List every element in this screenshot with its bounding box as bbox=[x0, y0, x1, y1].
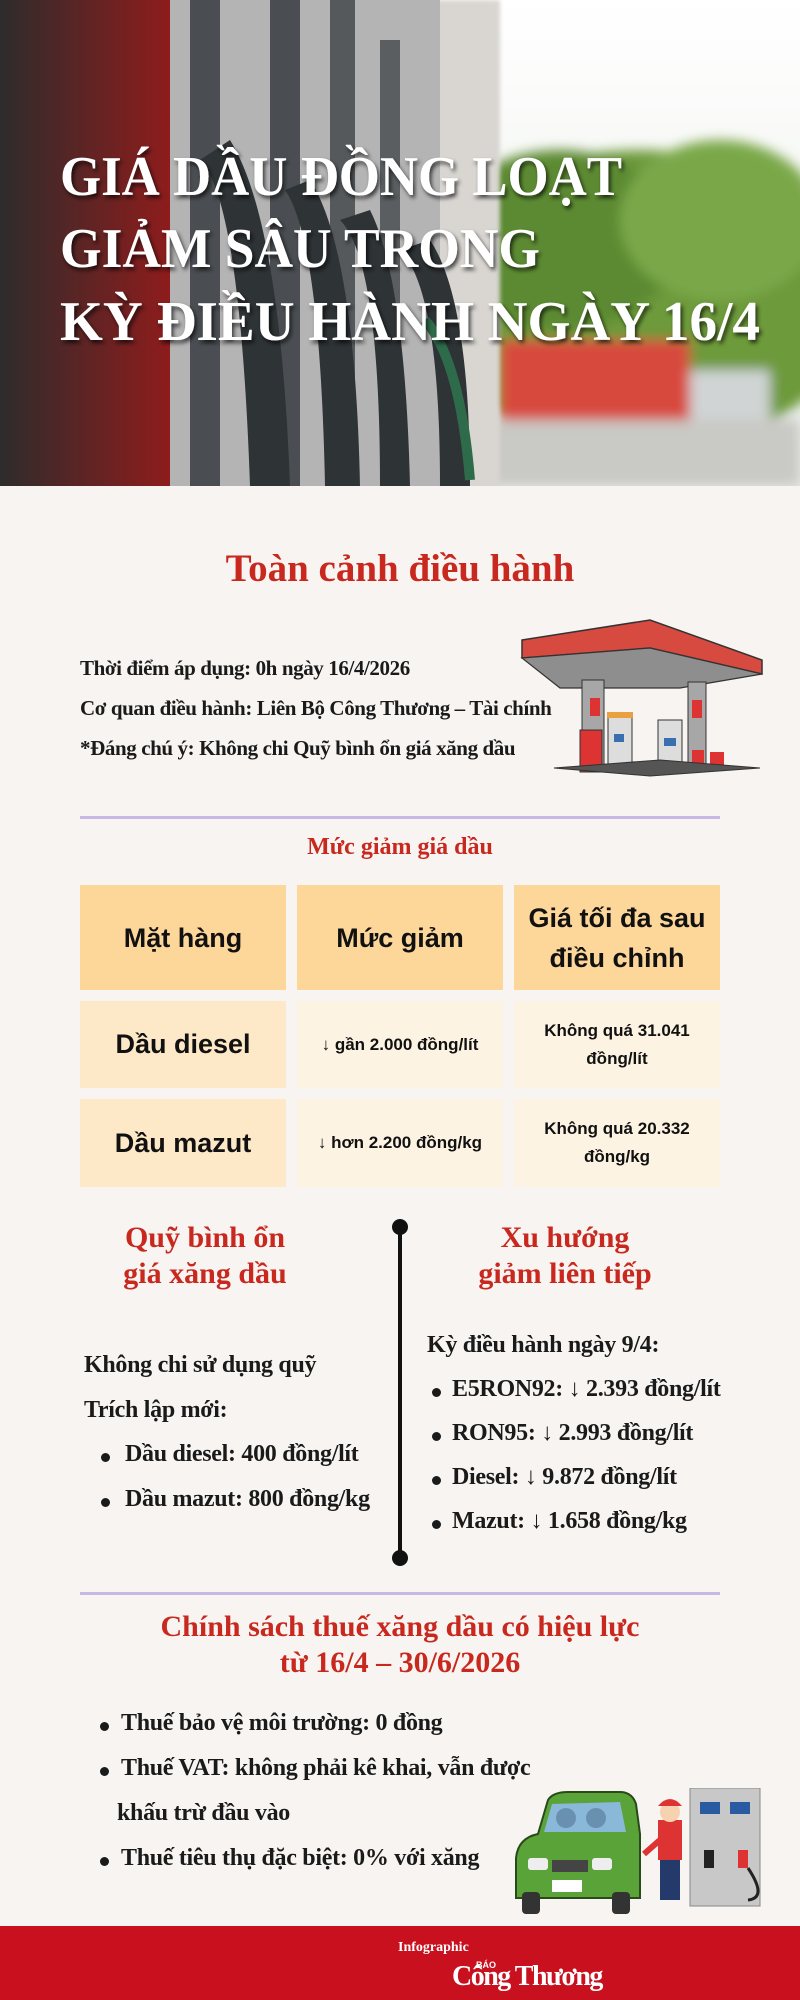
text block: trend bbox=[427, 1332, 721, 1534]
heading: tax policy: Chính sách thuế xăng dầu có hiệu lực bbox=[161, 1610, 639, 1643]
text block: trend: Kỳ điều hành ngày 9/4: bbox=[427, 1332, 659, 1358]
header: giá tối đa: Giá tối đa sau bbox=[528, 902, 706, 932]
heading: tax policy: từ 16/4 – 30/6/2026 bbox=[280, 1646, 520, 1679]
text block: trend: E5RON92: ↓ 2.393 đồng/lít bbox=[452, 1376, 721, 1402]
row: dầu mazut bbox=[80, 1099, 286, 1187]
logo bbox=[398, 1940, 604, 1992]
divider bbox=[80, 816, 720, 819]
title: GIẢM SÂU TRONG bbox=[60, 217, 540, 280]
heading: xu hướng bbox=[478, 1221, 652, 1290]
table: price reductions: Không quá 31.041 bbox=[544, 1020, 690, 1040]
text block: overview info: Thời điểm áp dụng: 0h ngày 16/4/2026 bbox=[80, 656, 410, 680]
title: KỲ ĐIỀU HÀNH NGÀY 16/4 bbox=[60, 289, 760, 353]
text block: tax bullets: Thuế tiêu thụ đặc biệt: 0% với xăng bbox=[121, 1845, 479, 1871]
title bbox=[60, 144, 760, 353]
text block: trend: RON95: ↓ 2.993 đồng/lít bbox=[452, 1420, 693, 1446]
heading: quỹ bình ổn: Quỹ bình ổn bbox=[125, 1221, 285, 1254]
header: mặt hàng bbox=[80, 885, 286, 990]
table: price reductions bbox=[80, 885, 720, 1187]
header: giá tối đa bbox=[514, 885, 720, 990]
text block: fund: Dầu mazut: 800 đồng/kg bbox=[125, 1486, 370, 1512]
heading: quỹ bình ổn bbox=[123, 1221, 287, 1290]
text block: tax bullets: khấu trừ đầu vào bbox=[117, 1800, 290, 1826]
text block: overview info: Cơ quan điều hành: Liên Bộ Công Thương – Tài chính bbox=[80, 696, 551, 720]
heading: xu hướng: Xu hướng bbox=[501, 1221, 629, 1254]
vertical timeline line bbox=[392, 1219, 408, 1566]
icon: gas station bbox=[520, 619, 763, 776]
title: GIÁ DẦU ĐỒNG LOẠT bbox=[60, 144, 622, 208]
heading: toàn cảnh điều hành: Toàn cảnh điều hành bbox=[226, 547, 574, 590]
header: mức giảm: Mức giảm bbox=[336, 922, 464, 952]
text block: trend: Diesel: ↓ 9.872 đồng/lít bbox=[452, 1464, 677, 1490]
text block: fund: Không chi sử dụng quỹ bbox=[84, 1352, 316, 1378]
header: mức giảm bbox=[297, 885, 503, 990]
header: giá tối đa: điều chỉnh bbox=[549, 942, 684, 972]
text block: fund: Dầu diesel: 400 đồng/lít bbox=[125, 1441, 358, 1467]
logo: BÁO bbox=[476, 1960, 496, 1970]
footer bbox=[0, 1926, 800, 2000]
text block: trend: Mazut: ↓ 1.658 đồng/kg bbox=[452, 1508, 687, 1534]
heading: quỹ bình ổn: giá xăng dầu bbox=[123, 1257, 287, 1290]
table: price reductions: đồng/lít bbox=[586, 1048, 648, 1068]
table: price reductions: đồng/kg bbox=[584, 1147, 650, 1166]
logo: Infographic bbox=[398, 1940, 469, 1955]
text block: tax bullets: Thuế bảo vệ môi trường: 0 đồng bbox=[121, 1710, 442, 1736]
row: dầu mazut: Dầu mazut bbox=[115, 1128, 251, 1158]
header: mặt hàng: Mặt hàng bbox=[124, 922, 242, 952]
table: price reductions: Không quá 20.332 bbox=[544, 1119, 690, 1138]
hero banner bbox=[0, 0, 800, 486]
table: price reductions: ↓ hơn 2.200 đồng/kg bbox=[318, 1133, 482, 1152]
icon: car refuelling bbox=[515, 1788, 760, 1914]
row: dầu diesel: Dầu diesel bbox=[115, 1029, 251, 1059]
text block: tax bullets bbox=[100, 1710, 530, 1871]
heading: mức giảm giá dầu: Mức giảm giá dầu bbox=[307, 834, 493, 860]
text block: fund bbox=[84, 1352, 370, 1512]
text block: tax bullets: Thuế VAT: không phải kê khai, vẫn được bbox=[121, 1755, 530, 1781]
table: price reductions: ↓ gần 2.000 đồng/lít bbox=[322, 1034, 478, 1054]
heading: xu hướng: giảm liên tiếp bbox=[478, 1257, 652, 1290]
heading: tax policy bbox=[161, 1610, 639, 1679]
text block: overview info bbox=[80, 656, 552, 760]
divider bbox=[80, 1592, 720, 1595]
row: dầu diesel bbox=[80, 1001, 286, 1088]
text block: overview info: *Đáng chú ý: Không chi Quỹ bình ổn giá xăng dầu bbox=[80, 736, 515, 760]
text block: fund: Trích lập mới: bbox=[84, 1397, 227, 1423]
logo: Công Thương bbox=[452, 1961, 602, 1992]
